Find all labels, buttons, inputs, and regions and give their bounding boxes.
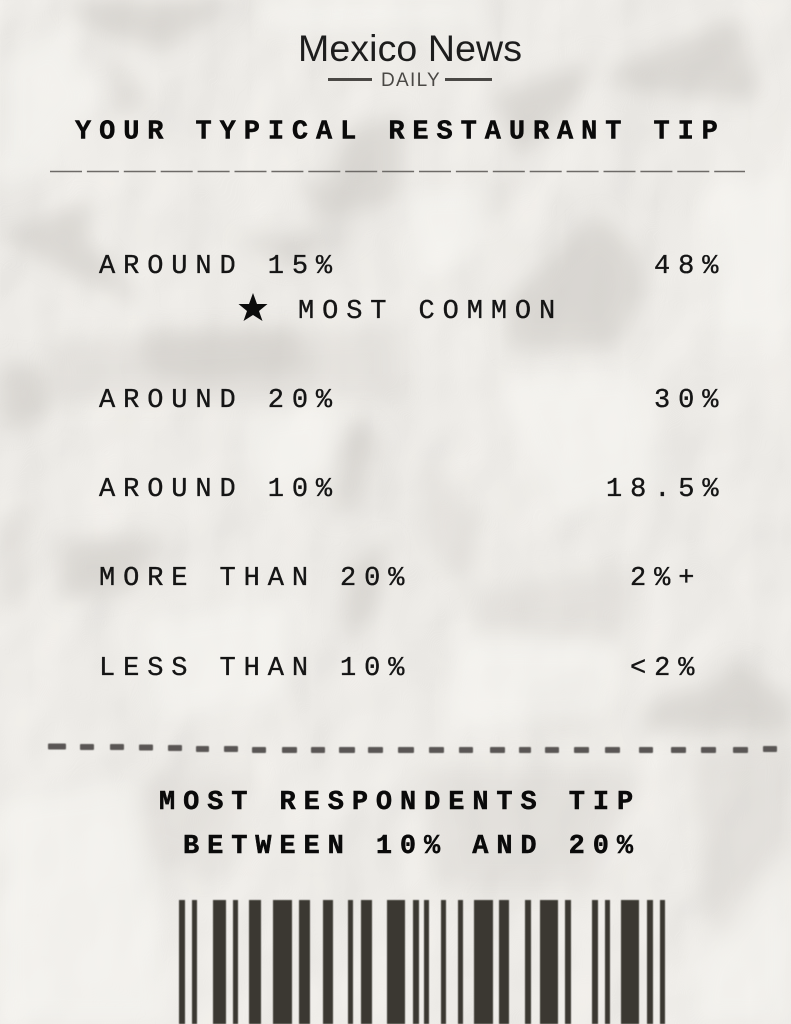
row: around 20% (99, 386, 726, 416)
logo: Mexico News Daily: DAILY (381, 70, 441, 91)
row: more than 20% (99, 564, 702, 594)
row: more than 20%: MORE THAN 20% (99, 564, 412, 594)
row: less than 10%: <2% (630, 654, 702, 684)
title: YOUR TYPICAL RESTAURANT TIP (75, 118, 726, 148)
summary text (159, 788, 641, 862)
dashed receipt divider (48, 744, 777, 753)
logo: Mexico News Daily (298, 27, 522, 91)
row: around 10% (99, 475, 727, 505)
row: around 15% (99, 252, 726, 282)
row: around 15%: 48% (654, 252, 726, 282)
row: around 10%: AROUND 10% (99, 475, 340, 505)
logo: Mexico News Daily: Mexico News (298, 27, 522, 69)
row: less than 10% (99, 654, 702, 684)
icon: barcode (179, 900, 665, 1024)
row: more than 20%: 2%+ (630, 564, 702, 594)
row: around 10%: 18.5% (606, 475, 727, 505)
most common callout with star icon: MOST COMMON (298, 297, 563, 327)
summary text: MOST RESPONDENTS TIP (159, 788, 641, 818)
tip results table (99, 252, 727, 684)
row: around 15%: AROUND 15% (99, 252, 340, 282)
summary text: BETWEEN 10% AND 20% (183, 832, 641, 862)
dashed rule under title (50, 170, 745, 172)
row: around 20%: 30% (654, 386, 726, 416)
row: around 20%: AROUND 20% (99, 386, 340, 416)
row: less than 10%: LESS THAN 10% (99, 654, 412, 684)
